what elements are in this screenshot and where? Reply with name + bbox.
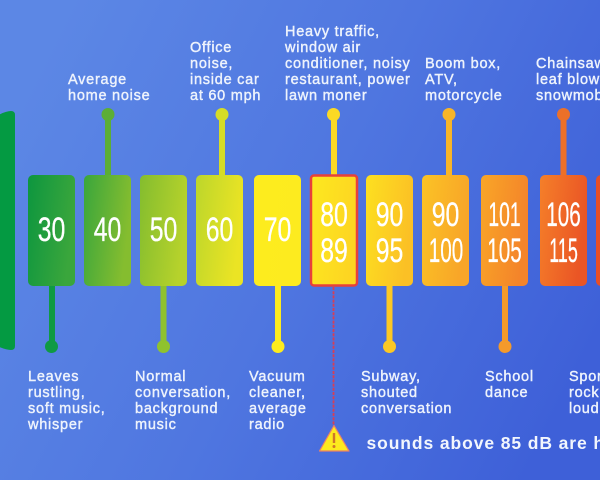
icon: warning triangle [320,426,349,451]
column: 80-89 dB, heavy traffic (highlighted): lawn moner [285,88,367,104]
dashed warning line [332,287,334,426]
column: 90-100 dB, boom box: Boom box, [425,56,501,72]
column: 101-105 dB, school dance: 105 [487,232,522,270]
column: 60 dB, office noise: Office [190,40,232,56]
column: 40 dB, average home noise: 40 [94,211,121,249]
column: 80-89 dB, heavy traffic (highlighted): restaurant, power [285,72,411,88]
column: 50 dB, normal conversation [135,175,231,433]
column: 30 dB, leaves rustling: Leaves [28,369,79,385]
column: 60 dB, office noise: at 60 mph [190,88,261,104]
column: 90-100 dB, boom box: ATV, [425,72,458,88]
column: 30 dB, leaves rustling: 30 [38,211,65,249]
column: next level, sporting events (cropped): loud [569,401,599,417]
column: 50 dB, normal conversation: Normal [135,369,186,385]
column: 90-100 dB, boom box: motorcycle [425,88,503,104]
column: 106-115 dB, chainsaw: 106 [546,196,581,234]
column: 40 dB, average home noise: home noise [68,88,150,104]
column: next level, sporting events (cropped): rock [569,385,599,401]
column: 70 dB, vacuum cleaner: radio [249,417,285,433]
column: 50 dB, normal conversation: conversation, [135,385,231,401]
column: 40 dB, average home noise [68,72,150,286]
column: 90-95 dB, subway: Subway, [361,369,421,385]
column: 60 dB, office noise: noise, [190,56,233,72]
column: 70 dB, vacuum cleaner [249,175,307,433]
column: 101-105 dB, school dance: School [485,369,534,385]
column: 60 dB, office noise [190,40,261,286]
column: 90-95 dB, subway: 90 [376,196,403,234]
column: 80-89 dB, heavy traffic (highlighted): Heavy traffic, [285,24,380,40]
column: 50 dB, normal conversation: background [135,401,218,417]
column: 50 dB, normal conversation: music [135,417,177,433]
column: 101-105 dB, school dance [481,175,534,401]
column: 80-89 dB, heavy traffic (highlighted): 80 [320,196,348,234]
column: 106-115 dB, chainsaw [536,56,600,286]
column: 90-100 dB, boom box: 90 [432,196,459,234]
column: 30 dB, leaves rustling: soft music, [28,401,106,417]
left green bar [0,111,15,350]
column: 80-89 dB, heavy traffic (highlighted): conditioner, noisy [285,56,411,72]
column: 90-100 dB, boom box: 100 [429,232,463,270]
column: 101-105 dB, school dance: 101 [488,195,521,233]
column: 80-89 dB, heavy traffic (highlighted) [284,24,411,286]
column: 106-115 dB, chainsaw: 115 [549,231,578,270]
column: 70 dB, vacuum cleaner: Vacuum [249,369,306,385]
column: next level, sporting events (cropped) [569,175,600,417]
column: 90-95 dB, subway [361,175,452,417]
column: 70 dB, vacuum cleaner: 70 [264,211,291,249]
column: 70 dB, vacuum cleaner: average [249,401,307,417]
column: 30 dB, leaves rustling: whisper [27,417,83,433]
column: 80-89 dB, heavy traffic (highlighted): 89 [320,232,348,270]
column: 60 dB, office noise: inside car [190,72,260,88]
column: 101-105 dB, school dance: dance [485,385,528,401]
column: 80-89 dB, heavy traffic (highlighted): window air [284,40,361,56]
column: 30 dB, leaves rustling: rustling, [28,385,86,401]
column: 40 dB, average home noise: Average [68,72,127,88]
column: 90-95 dB, subway: conversation [361,401,452,417]
column: 90-95 dB, subway: shouted [361,385,418,401]
column: 60 dB, office noise: 60 [206,211,233,249]
column: 30 dB, leaves rustling [27,175,106,433]
column: 90-95 dB, subway: 95 [376,232,403,270]
column: 90-100 dB, boom box [422,56,503,286]
column: 50 dB, normal conversation: 50 [150,211,177,249]
column: 70 dB, vacuum cleaner: cleaner, [249,385,306,401]
